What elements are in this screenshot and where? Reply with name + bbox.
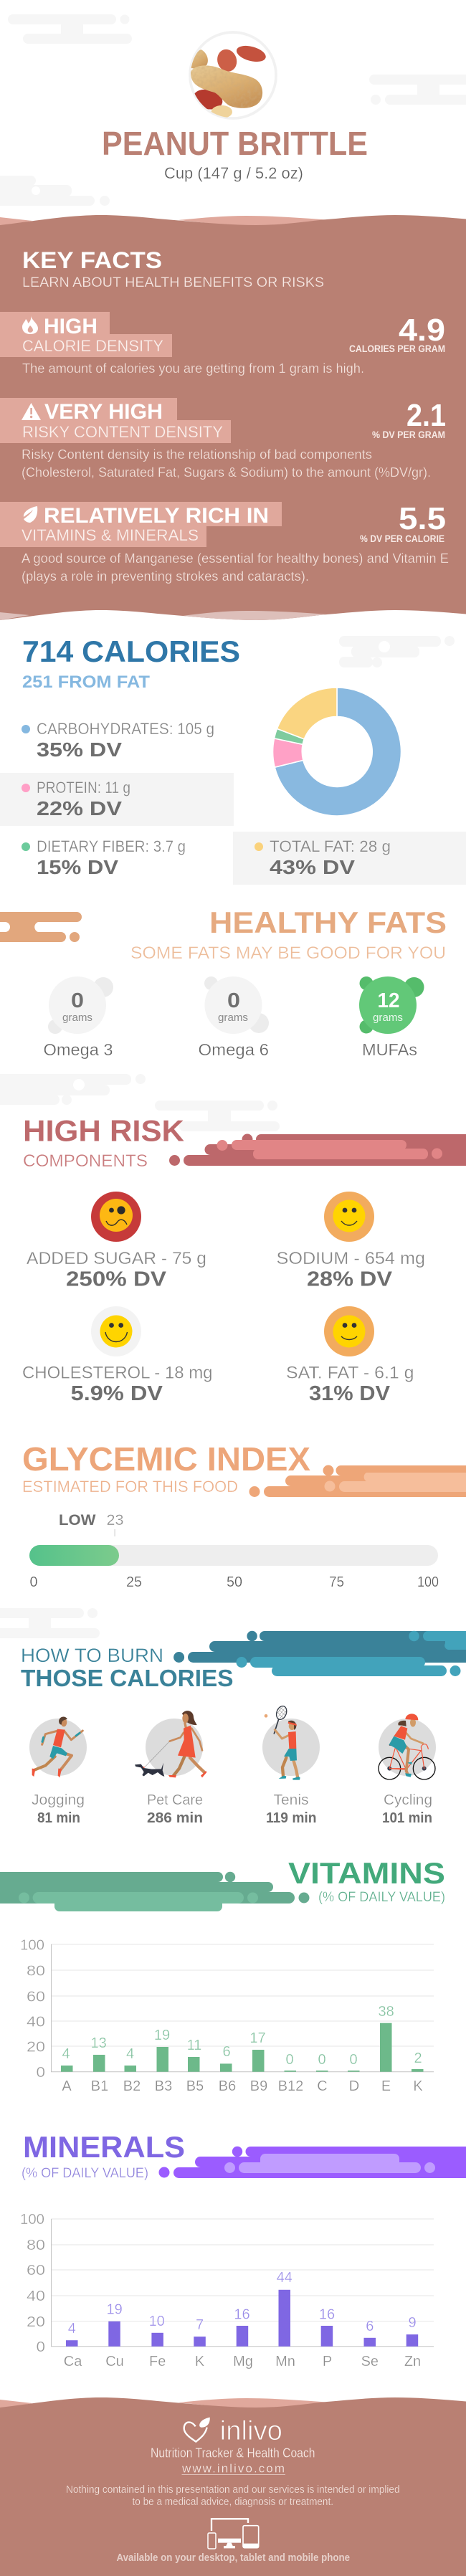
bar chart: vitamins: 13 <box>90 2035 107 2051</box>
bar chart: minerals: 100 <box>20 2212 44 2228</box>
banner: glycemic <box>249 1465 466 1497</box>
fact: risky content density <box>0 398 446 480</box>
bar chart: vitamins: 4 <box>62 2046 70 2062</box>
risk: sodium: 28% DV <box>307 1268 393 1291</box>
gauge axis: 100 <box>417 1574 439 1590</box>
bar chart: vitamins: 2 <box>414 2050 422 2066</box>
availability note: Available on your desktop, tablet and mobile phone <box>116 2552 350 2564</box>
stat: omega 3 <box>43 976 113 1059</box>
food image: peanuts <box>190 32 276 118</box>
logo: inlivo <box>184 2416 282 2446</box>
bar chart: vitamins: B6 <box>219 2078 236 2094</box>
stat: omega 3: Omega 3 <box>43 1040 113 1059</box>
risk: cholesterol: 5.9% DV <box>71 1382 163 1405</box>
bar chart: minerals: P <box>323 2354 332 2370</box>
bar chart: vitamins: B2 <box>123 2078 141 2094</box>
heading: key facts: KEY FACTS <box>22 247 162 273</box>
banner: minerals <box>159 2147 466 2178</box>
stat: mufas: 12 <box>377 989 400 1012</box>
bar chart: vitamins: 17 <box>249 2030 266 2046</box>
bar chart: vitamins: 19 <box>154 2028 170 2043</box>
fact: calorie density: 4.9 <box>399 313 445 348</box>
gauge axis: 50 <box>227 1574 242 1590</box>
heading: vitamins: VITAMINS <box>288 1856 445 1890</box>
subheading: from fat: 251 FROM FAT <box>22 672 150 692</box>
stat: omega 6 <box>198 976 269 1059</box>
bar chart: vitamins: 60 <box>27 1989 45 2005</box>
bar chart: vitamins: 4 <box>126 2046 134 2062</box>
bar chart: vitamins: B1 <box>91 2078 108 2094</box>
panel: minerals <box>20 2130 466 2370</box>
stat: mufas <box>359 976 424 1059</box>
banner: healthy fats <box>0 912 82 942</box>
bar chart: minerals: 80 <box>27 2238 45 2253</box>
risk: added sugar: 250% DV <box>66 1268 167 1291</box>
bar chart: minerals: 44 <box>277 2270 293 2286</box>
icon: flame <box>22 315 38 334</box>
bar chart: minerals: Cu <box>105 2354 124 2370</box>
fact: calorie density: CALORIE DENSITY <box>22 337 163 355</box>
banner: vitamins <box>0 1872 310 1911</box>
gauge axis <box>30 1574 439 1590</box>
gauge bar <box>29 1545 438 1566</box>
tagline: Nutrition Tracker & Health Coach <box>151 2446 315 2461</box>
fact: calorie density: CALORIES PER GRAM <box>349 343 445 354</box>
fact: calorie density <box>0 312 445 376</box>
bar chart: vitamins: 100 <box>20 1937 44 1953</box>
bar chart: minerals: K <box>195 2354 205 2370</box>
bar chart: vitamins: 0 <box>318 2052 326 2068</box>
risk: saturated fat: SAT. FAT - 6.1 g <box>286 1364 414 1382</box>
fact: vitamins and minerals <box>0 501 449 584</box>
label: cycling <box>382 1792 432 1826</box>
heading: calories: 714 CALORIES <box>22 635 240 668</box>
activity: cycling <box>379 1714 436 1779</box>
gauge label <box>59 1511 124 1536</box>
bar chart: minerals: Zn <box>404 2354 421 2370</box>
risk: added sugar <box>27 1192 206 1291</box>
legend: carbohydrates <box>22 720 214 761</box>
bar chart: vitamins: 40 <box>27 2015 45 2030</box>
heading: those calories: THOSE CALORIES <box>21 1665 234 1691</box>
fact: risky content density: 2.1 <box>406 398 446 433</box>
activity: jogging <box>29 1716 87 1777</box>
subheading: components: COMPONENTS <box>23 1151 148 1171</box>
bar chart: minerals: 19 <box>106 2302 123 2318</box>
bar chart: minerals: 10 <box>149 2314 165 2329</box>
gauge axis: 25 <box>126 1574 142 1590</box>
stat: omega 3: grams <box>62 1012 92 1024</box>
activity: tennis <box>262 1705 320 1780</box>
disclaimer: to be a medical advice, diagnosis or treatment. <box>132 2496 333 2508</box>
legend: protein: 22% DV <box>37 797 122 819</box>
bar chart: minerals: 4 <box>68 2321 76 2337</box>
fact: vitamins and minerals: VITAMINS & MINERALS <box>22 526 199 544</box>
bar chart: vitamins <box>20 1937 434 2094</box>
stat: mufas: MUFAs <box>362 1040 417 1059</box>
risk: added sugar: ADDED SUGAR - 75 g <box>27 1249 206 1268</box>
fact: risky content density: % DV PER GRAM <box>372 429 445 440</box>
gauge axis: 0 <box>30 1574 37 1590</box>
bar chart: minerals: Ca <box>64 2354 82 2370</box>
bar chart: vitamins: 0 <box>285 2052 294 2068</box>
serving size: Cup (147 g / 5.2 oz) <box>164 164 303 182</box>
legend: total fat <box>255 837 391 878</box>
label: cycling: Cycling <box>384 1792 432 1808</box>
label: jogging <box>32 1792 85 1826</box>
bar chart: vitamins: E <box>381 2078 391 2094</box>
heading: high risk: HIGH RISK <box>23 1114 184 1147</box>
legend: dietary fiber <box>22 837 186 878</box>
subheading: SOME FATS MAY BE GOOD FOR YOU <box>130 944 446 963</box>
fact: vitamins and minerals: A good source of Manganese (essential for healthy bones) and Vitamin E <box>22 551 449 566</box>
label: cycling: 101 min <box>382 1810 432 1826</box>
fact: risky content density: Risky Content density is the relationship of bad components <box>22 447 372 462</box>
legend: protein: PROTEIN: 11 g <box>37 779 130 797</box>
fact: calorie density: The amount of calories you are getting from 1 gram is high. <box>22 361 364 376</box>
fact: calorie density: HIGH <box>44 315 98 338</box>
stat: omega 6: grams <box>218 1012 248 1024</box>
bar chart: vitamins: B12 <box>278 2078 303 2094</box>
heading: healthy fats: HEALTHY FATS <box>209 906 447 939</box>
bar chart: minerals <box>20 2212 434 2370</box>
bar chart: vitamins: 0 <box>349 2052 358 2068</box>
bar chart: minerals: 16 <box>234 2307 250 2323</box>
bar chart: minerals: Mg <box>233 2354 253 2370</box>
fact: risky content density: RISKY CONTENT DENSITY <box>22 423 223 441</box>
label: tenis: Tenis <box>274 1792 308 1808</box>
gauge axis: 75 <box>329 1574 344 1590</box>
logo: inlivo: inlivo <box>220 2416 282 2446</box>
stat: omega 6: 0 <box>227 989 240 1012</box>
risk: sodium <box>277 1192 425 1291</box>
bar chart: vitamins: 11 <box>187 2038 201 2053</box>
bar chart: vitamins: B9 <box>250 2078 267 2094</box>
fact: risky content density: VERY HIGH <box>44 400 163 424</box>
title: PEANUT BRITTLE <box>102 125 368 162</box>
bar chart: minerals: 7 <box>196 2317 204 2333</box>
legend: dietary fiber: 15% DV <box>37 856 118 878</box>
bar chart: vitamins: 6 <box>222 2044 231 2060</box>
heading: glycemic index: GLYCEMIC INDEX <box>22 1440 310 1478</box>
label: jogging: 81 min <box>37 1810 80 1826</box>
bar chart: minerals: Se <box>361 2354 379 2370</box>
activity: pet care <box>135 1711 206 1777</box>
fact: vitamins and minerals: (plays a role in preventing strokes and cataracts). <box>22 569 309 584</box>
bar chart: vitamins: 20 <box>27 2039 45 2055</box>
bar chart: minerals: 40 <box>27 2289 45 2304</box>
panel: calories <box>0 635 466 885</box>
banner: burn <box>173 1631 466 1676</box>
subheading: (% OF DAILY VALUE) <box>22 2165 148 2181</box>
bar chart: vitamins: C <box>317 2078 328 2094</box>
bar chart: minerals: Mn <box>275 2354 295 2370</box>
icon: leaf <box>24 506 37 523</box>
label: pet care <box>147 1792 203 1826</box>
legend: total fat: 43% DV <box>270 856 355 878</box>
label: tenis <box>266 1792 317 1826</box>
legend: protein <box>22 779 130 819</box>
bar chart: minerals: Fe <box>149 2354 166 2370</box>
subheading: LEARN ABOUT HEALTH BENEFITS OR RISKS <box>22 275 324 290</box>
bar chart: minerals: 6 <box>366 2319 374 2334</box>
stat: mufas: grams <box>373 1012 403 1024</box>
legend: dietary fiber: DIETARY FIBER: 3.7 g <box>37 837 186 855</box>
bar chart: vitamins: K <box>413 2078 423 2094</box>
gauge label: 23 <box>106 1511 124 1529</box>
fact: vitamins and minerals: % DV PER CALORIE <box>360 533 444 544</box>
stat: omega 6: Omega 6 <box>198 1040 269 1059</box>
bar chart: minerals: 9 <box>408 2315 417 2331</box>
icon: warning triangle <box>22 403 41 420</box>
fact: vitamins and minerals: 5.5 <box>399 501 446 536</box>
disclaimer: Nothing contained in this presentation and our services is intended or implied <box>66 2484 400 2496</box>
bar chart: vitamins: D <box>349 2078 359 2094</box>
panel: healthy fats <box>0 906 447 1059</box>
footer <box>0 2397 466 2576</box>
risk: cholesterol: CHOLESTEROL - 18 mg <box>22 1364 212 1382</box>
bar chart: vitamins: 38 <box>378 2004 394 2020</box>
website: www.inlivo.com <box>181 2462 285 2476</box>
fact: vitamins and minerals: RELATIVELY RICH IN <box>44 504 269 528</box>
legend: carbohydrates: 35% DV <box>37 738 122 761</box>
banner: high risk <box>169 1134 466 1166</box>
donut chart <box>273 688 401 816</box>
bar chart: vitamins: 0 <box>36 2065 45 2081</box>
label: jogging: Jogging <box>32 1792 85 1808</box>
gauge label: LOW <box>59 1511 96 1529</box>
subheading: (% OF DAILY VALUE) <box>318 1889 445 1905</box>
panel: burn calories <box>21 1631 466 1826</box>
label: pet care: 286 min <box>147 1810 203 1826</box>
panel: high risk components <box>22 1114 466 1405</box>
bar chart: vitamins: 80 <box>27 1963 45 1979</box>
heading: how to burn: HOW TO BURN <box>21 1645 163 1666</box>
icon: devices <box>208 2519 259 2549</box>
risk: saturated fat: 31% DV <box>309 1382 391 1405</box>
label: pet care: Pet Care <box>147 1792 203 1808</box>
bar chart: minerals: 16 <box>319 2307 335 2323</box>
bar chart: vitamins: B3 <box>155 2078 172 2094</box>
stat: omega 3: 0 <box>71 989 84 1012</box>
label: tenis: 119 min <box>266 1810 317 1826</box>
bar chart: vitamins: A <box>62 2078 72 2094</box>
legend: total fat: TOTAL FAT: 28 g <box>270 837 391 855</box>
subheading: ESTIMATED FOR THIS FOOD <box>22 1478 238 1496</box>
heading: minerals: MINERALS <box>23 2130 185 2164</box>
panel: vitamins <box>0 1856 445 2094</box>
bar chart: minerals: 60 <box>27 2263 45 2278</box>
risk: saturated fat <box>286 1306 414 1405</box>
bar chart: minerals: 20 <box>27 2314 45 2330</box>
legend: carbohydrates: CARBOHYDRATES: 105 g <box>37 720 214 738</box>
bar chart: vitamins: B5 <box>186 2078 204 2094</box>
risk: sodium: SODIUM - 654 mg <box>277 1249 425 1268</box>
disclaimer <box>66 2484 400 2508</box>
bar chart: minerals: 0 <box>36 2339 45 2355</box>
panel: key facts <box>0 215 466 624</box>
fact: risky content density: (Cholesterol, Saturated Fat, Sugars & Sodium) to the amount (%DV/gr). <box>22 465 431 480</box>
risk: cholesterol <box>22 1306 212 1405</box>
panel: glycemic index <box>22 1440 466 1590</box>
